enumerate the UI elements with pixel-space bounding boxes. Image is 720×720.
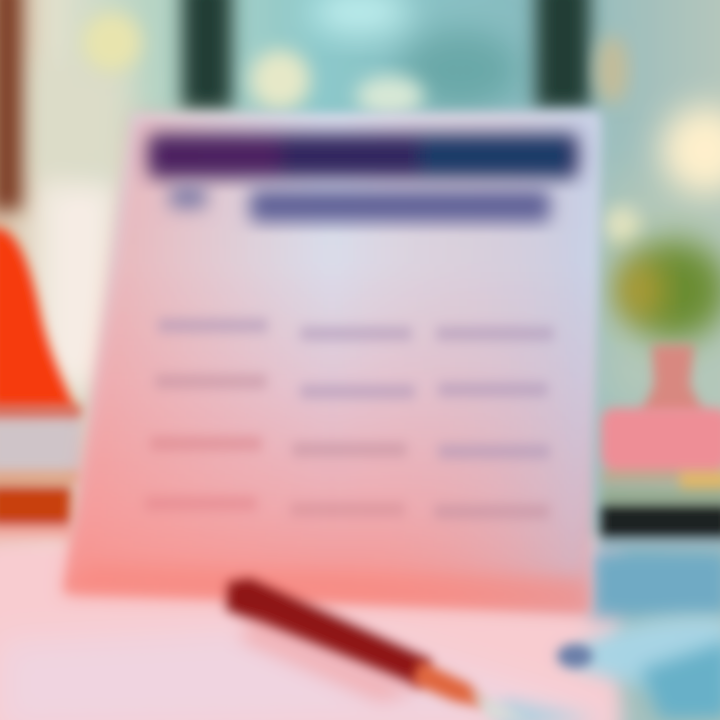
- text block: blurred table rows: [145, 318, 554, 519]
- orange cone object: [0, 227, 76, 410]
- bokeh lights: [82, 0, 720, 243]
- window frame posts: [0, 0, 590, 210]
- heading: blurred title bar: [148, 134, 578, 178]
- icon: red pen: [226, 578, 530, 720]
- subheading: blurred second line: [170, 186, 550, 222]
- stack of books left: [0, 405, 82, 542]
- blue object lower right: [500, 550, 720, 720]
- plant and vase: [618, 240, 720, 415]
- stack of books right: [600, 408, 720, 550]
- panel: blurred paper sheet: [64, 112, 600, 612]
- table surface: [0, 540, 640, 720]
